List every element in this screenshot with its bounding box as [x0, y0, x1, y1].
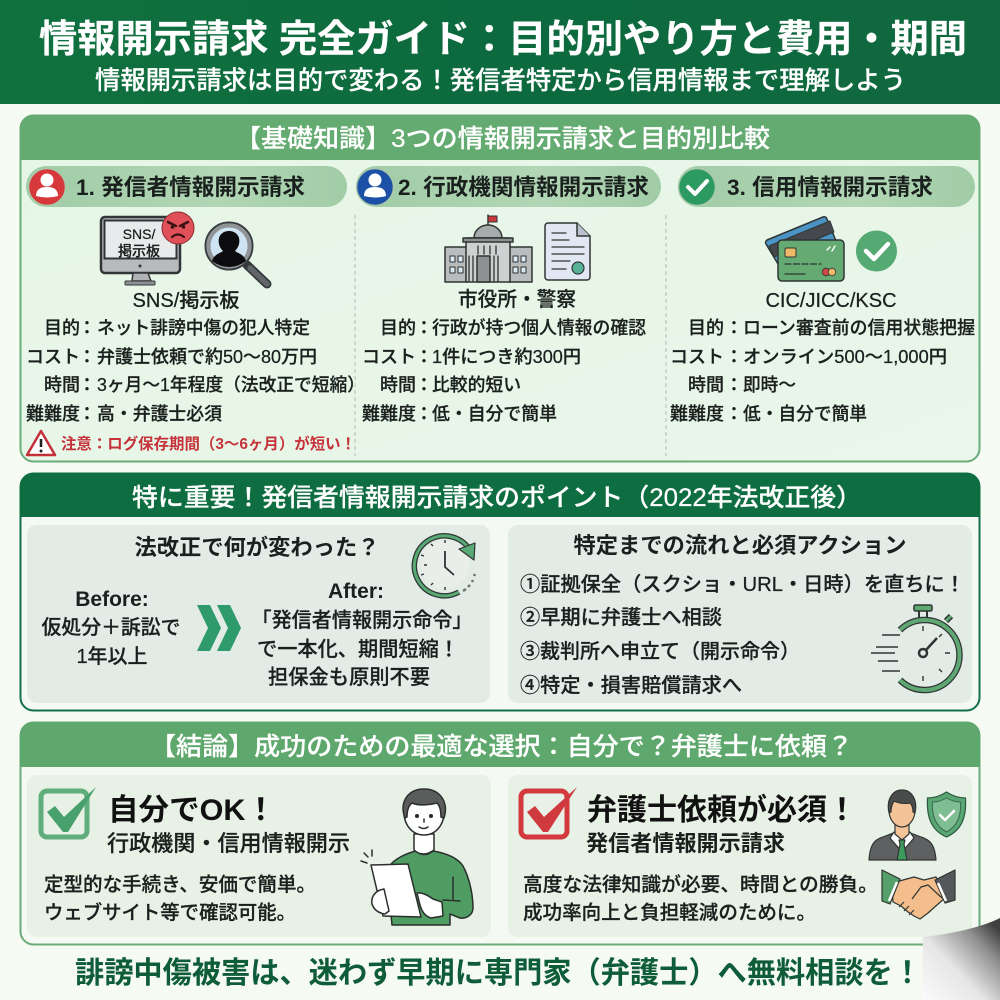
card subheading: 発信者情報開示請求: [586, 831, 785, 856]
row: cost: ：: [78, 347, 96, 367]
column 2: administrative disclosure: [356, 166, 661, 424]
row: purpose: 目的: [44, 318, 80, 338]
warning note: 注意：ログ保存期間（3〜6ヶ月）が短い！: [61, 434, 356, 453]
row: cost: コスト: [670, 347, 724, 367]
card: lawyer required: [508, 775, 972, 937]
card subheading: 行政機関・信用情報開示: [107, 831, 350, 856]
card heading: 弁護士依頼が必須！: [587, 793, 857, 827]
description: ウェブサイト等で確認可能。: [44, 901, 296, 924]
row: difficulty: ：: [725, 404, 743, 424]
icon: monitor with angry face: SNS/: [123, 226, 155, 242]
card: do it yourself: [27, 775, 491, 937]
row: time: 3ヶ月〜1年程度（法改正で短縮）: [97, 375, 365, 395]
column 1: sender disclosure: [26, 166, 365, 455]
icon: check circle: [856, 230, 897, 272]
after text: 「発信者情報開示命令」: [252, 609, 472, 632]
step 3: ③裁判所へ申立て（開示命令）: [520, 640, 800, 663]
row: cost: 1件につき約300円: [432, 347, 581, 367]
row: difficulty: 低・自分で簡単: [432, 404, 557, 424]
icon: lawyer: [869, 790, 936, 860]
icon: monitor with angry face: [101, 212, 194, 285]
row: time: ：: [78, 375, 96, 395]
row: cost: 弁護士依頼で約50〜80万円: [97, 347, 317, 367]
description: 高度な法律知識が必要、時間との勝負。: [523, 874, 878, 896]
after text: [252, 580, 472, 689]
card heading: 自分でOK！: [108, 794, 276, 827]
row: purpose: ：: [725, 318, 743, 338]
label: credit bureaus: CIC/JICC/KSC: [766, 290, 896, 312]
row: difficulty: ：: [78, 404, 96, 424]
card heading: 法改正で何が変わった？: [134, 535, 380, 560]
row: difficulty: 難難度: [670, 404, 724, 424]
row: time: 時間: [44, 375, 80, 395]
row: time: ：: [415, 375, 433, 395]
row: difficulty: 低・自分で簡単: [743, 404, 867, 424]
row: cost: ：: [725, 347, 743, 367]
panel: important points: [20, 473, 980, 710]
footer call to action: 誹謗中傷被害は、迷わず早期に専門家（弁護士）へ無料相談を！: [75, 957, 922, 990]
row: cost: [362, 347, 581, 367]
panel heading: basic knowledge: 【基礎知識】3つの情報開示請求と目的別比較: [235, 125, 770, 153]
panel: conclusion: [20, 722, 980, 944]
row: difficulty: [670, 404, 867, 424]
card: process steps: [508, 525, 972, 703]
row: time: 時間: [688, 375, 724, 395]
row: difficulty: 難難度: [26, 404, 80, 424]
row: cost: コスト: [362, 347, 416, 367]
description: [44, 874, 316, 924]
subtitle: 情報開示請求は目的で変わる！発信者特定から信用情報まで理解しよう: [95, 67, 906, 95]
before text: [42, 588, 180, 668]
after text: で一本化、期間短縮！: [257, 638, 459, 661]
header banner: [0, 0, 1000, 104]
panel heading: important points: 特に重要！発信者情報開示請求のポイント（2022年法改正後）: [132, 484, 862, 512]
arrow: double chevron: [197, 605, 241, 651]
step 2: ②早期に弁護士へ相談: [520, 606, 722, 629]
panel: basic knowledge: [20, 115, 980, 462]
row: difficulty: [26, 404, 222, 424]
row: purpose: 行政が持つ個人情報の確認: [432, 317, 646, 338]
description: 定型的な手続き、安価で簡単。: [44, 874, 316, 896]
step 4: ④特定・損害賠償請求へ: [520, 674, 742, 697]
before text: 仮処分＋訴訟で: [42, 616, 180, 639]
card heading: 特定までの流れと必須アクション: [574, 533, 906, 558]
icon: stopwatch: [871, 605, 959, 690]
pill heading 2: [356, 166, 661, 207]
row: purpose: ネット誹謗中傷の犯人特定: [97, 318, 310, 338]
description: [523, 874, 878, 924]
row: time: ：: [725, 375, 743, 395]
pill heading 3: 3. 信用情報開示請求: [727, 175, 933, 200]
step 1: ①証拠保全（スクショ・URL・日時）を直ちに！: [520, 573, 965, 596]
icon: government building: [445, 215, 532, 282]
icon: credit cards: [766, 217, 844, 281]
row: time: [688, 375, 796, 395]
page curl corner: [922, 918, 1000, 1000]
label: SNS/board: SNS/掲示板: [132, 289, 240, 312]
pill heading 2: 2. 行政機関情報開示請求: [398, 175, 649, 200]
row: cost: コスト: [26, 347, 80, 367]
row: purpose: ローン審査前の信用状態把握: [743, 318, 975, 338]
after text: After:: [328, 580, 384, 603]
title: 情報開示請求 完全ガイド：目的別やり方と費用・期間: [39, 19, 967, 61]
row: time: 比較的短い: [432, 375, 521, 395]
row: cost: ：: [415, 347, 433, 367]
row: difficulty: 高・弁護士必須: [97, 404, 222, 424]
row: time: 時間: [380, 375, 416, 395]
icon: monitor with angry face: 掲示板: [118, 243, 160, 259]
icon: person reading paper: [361, 789, 473, 925]
label: city hall and police: 市役所・警察: [458, 288, 576, 311]
description: 成功率向上と負担軽減のために。: [523, 902, 816, 924]
icon: document: [545, 223, 590, 280]
row: difficulty: [362, 404, 557, 424]
before text: 1年以上: [76, 645, 148, 668]
icon: shield: [927, 792, 966, 837]
row: difficulty: ：: [415, 404, 433, 424]
icon: magnifier with silhouette: [206, 222, 267, 284]
row: purpose: ：: [78, 318, 96, 338]
before text: Before:: [75, 588, 149, 611]
pill heading 3: [678, 166, 975, 207]
row: difficulty: 難難度: [362, 404, 416, 424]
column 3: credit disclosure: [670, 166, 975, 424]
icon: green check box: [41, 787, 96, 837]
row: purpose: 目的: [688, 318, 724, 338]
pill heading 1: [26, 166, 347, 207]
after text: 担保金も原則不要: [268, 666, 430, 689]
panel heading: conclusion: 【結論】成功のための最適な選択：自分で？弁護士に依頼？: [150, 733, 853, 761]
row: cost: オンライン500〜1,000円: [743, 347, 947, 367]
icon: handshake: [882, 870, 955, 919]
row: time: [380, 375, 521, 395]
row: purpose: ：: [415, 318, 433, 338]
icon: clock with arrow: [414, 536, 475, 596]
warning note: [27, 431, 356, 455]
row: time: 即時〜: [743, 375, 796, 395]
pill heading 1: 1. 発信者情報開示請求: [76, 175, 305, 200]
card: what changed: [27, 525, 490, 703]
row: purpose: 目的: [380, 318, 416, 338]
icon: red check box: [521, 787, 577, 837]
